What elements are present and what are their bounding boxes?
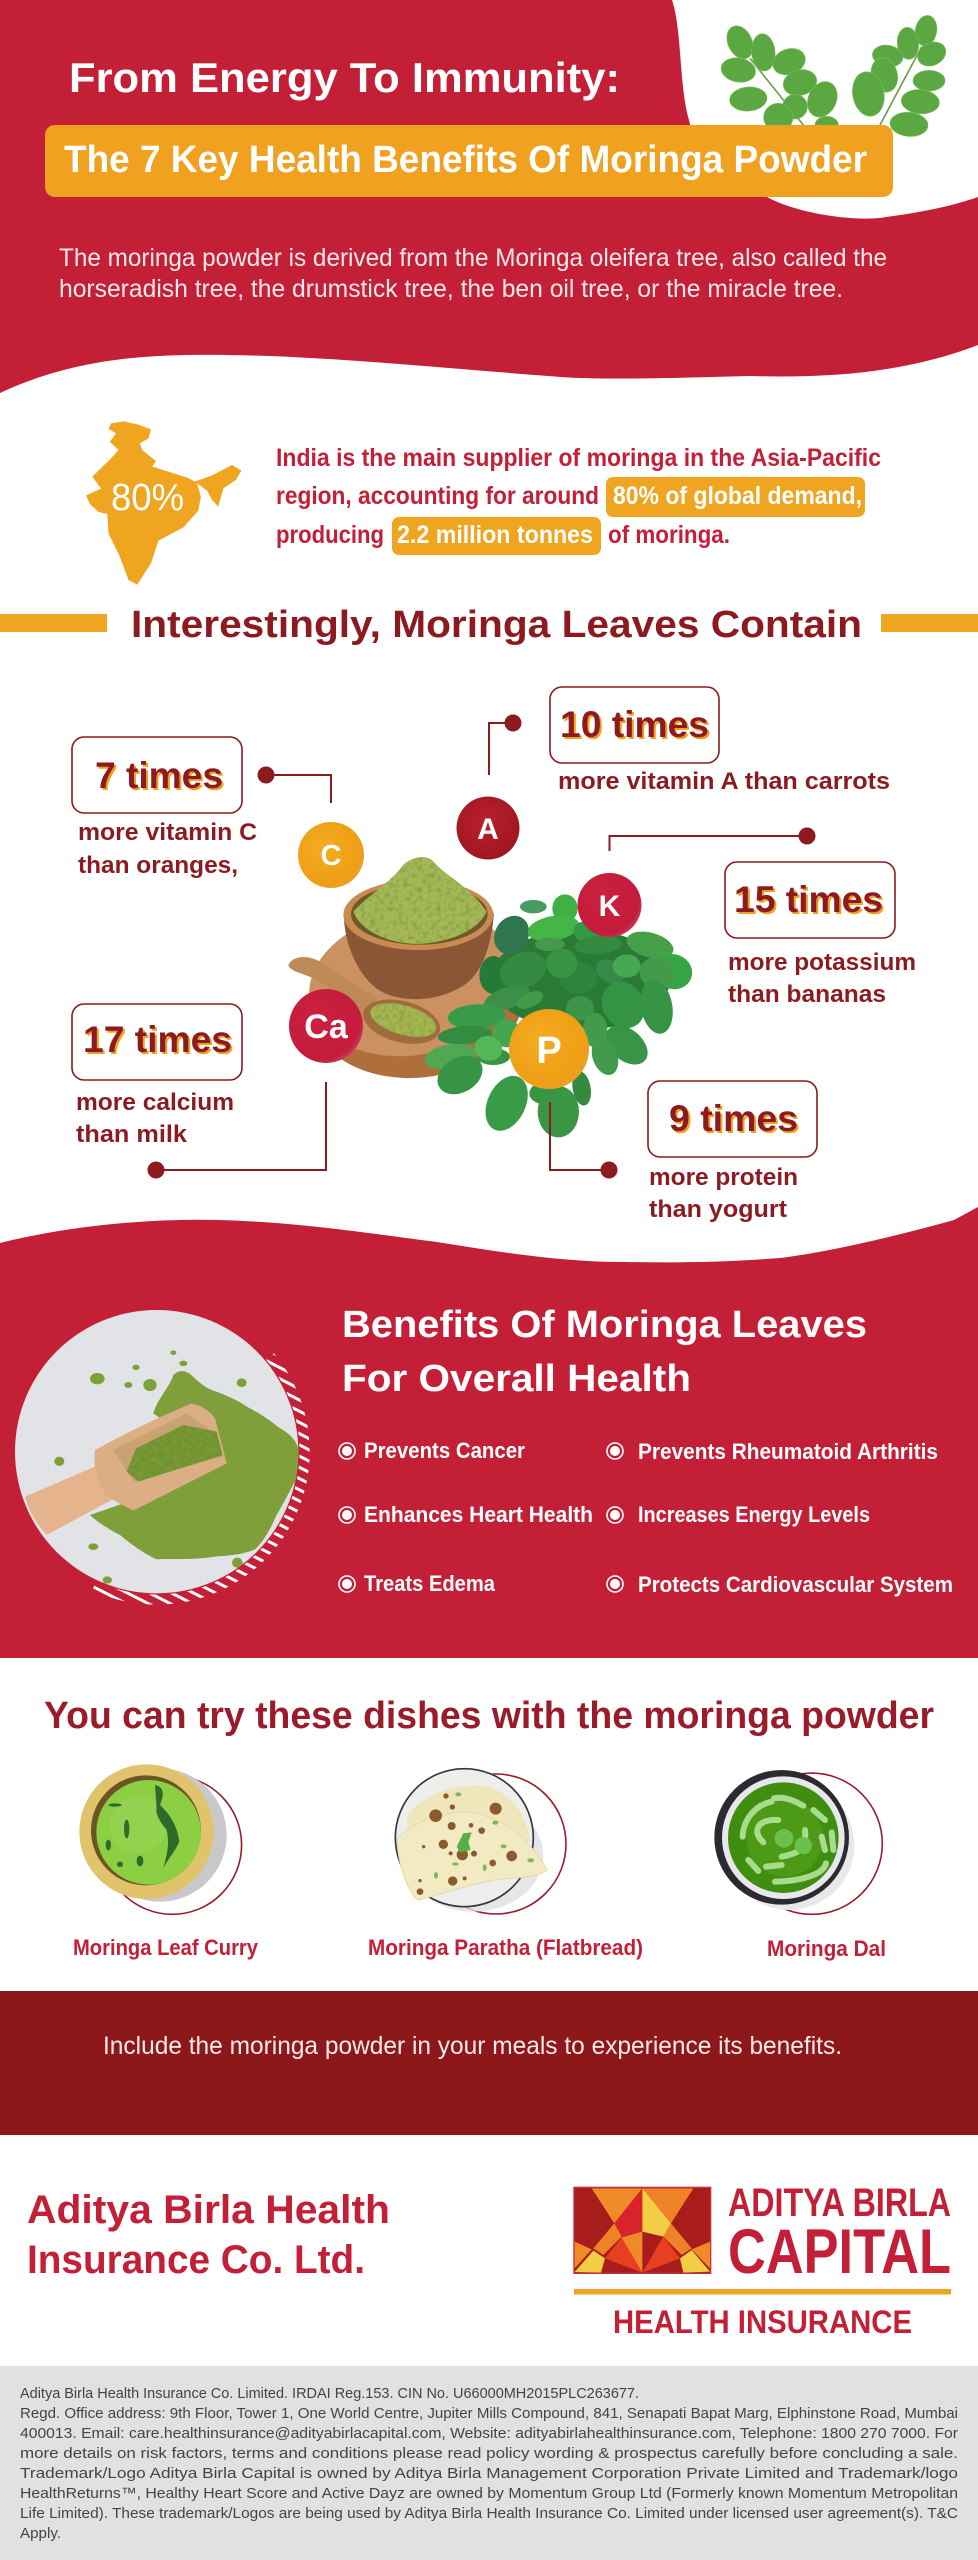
text block: supply facts: 80% of global demand, [613, 482, 862, 510]
stat: 15 times potassium: more potassium [728, 949, 916, 976]
logo: Aditya Birla Capital Health Insurance [574, 2181, 951, 2340]
stat: 17 times calcium: than milk [76, 1121, 188, 1148]
text block: supply facts: producing [276, 521, 384, 549]
stat: 9 times protein: 9 times [669, 1098, 798, 1139]
benefit list: Enhances Heart Health [364, 1502, 593, 1527]
stat: 7 times vitamin C: 7 times [95, 755, 223, 796]
panel: legal disclaimer [0, 2366, 978, 2560]
intro paragraph [59, 244, 887, 303]
stat: 17 times calcium: Ca [304, 1008, 349, 1046]
panel: benefits [0, 1207, 978, 1658]
company name: Insurance Co. Ltd. [27, 2238, 365, 2282]
dish: Moringa Leaf Curry [73, 1764, 259, 1960]
stat: 17 times calcium: more calcium [76, 1089, 234, 1116]
panel: legal disclaimer: Trademark/Logo Aditya Birla Capital is owned by Aditya Birla Management Corporation Private Limited and Trademark/logo [20, 2465, 958, 2482]
intro paragraph: The moringa powder is derived from the Moringa oleifera tree, also called the [59, 244, 887, 272]
panel: legal disclaimer: Apply. [20, 2525, 61, 2542]
title: From Energy To Immunity: [69, 54, 620, 101]
heading [342, 1304, 867, 1400]
red wave background [0, 1207, 978, 1658]
icon: India map with 80%: 80% [111, 477, 184, 519]
intro paragraph: horseradish tree, the drumstick tree, the ben oil tree, or the miracle tree. [59, 275, 843, 303]
stat: 9 times protein [509, 1009, 817, 1223]
illustration: bowl, spoon and moringa leaves [288, 857, 697, 1138]
stat: 9 times protein: P [536, 1030, 562, 1072]
panel: header [0, 0, 978, 393]
stat: 7 times vitamin C: more vitamin C [78, 819, 257, 846]
text block: supply facts: region, accounting for around [276, 482, 599, 510]
text block: supply facts [276, 444, 881, 555]
benefit list: Increases Energy Levels [638, 1502, 870, 1527]
stat: 7 times vitamin C: than oranges, [78, 852, 238, 879]
stat: 10 times vitamin A: A [477, 813, 499, 846]
heading: Interestingly, Moringa Leaves Contain: Interestingly, Moringa Leaves Contain [131, 604, 862, 646]
stat: 15 times potassium: than bananas [728, 981, 886, 1008]
stat: 15 times potassium: 15 times [734, 879, 883, 920]
panel: legal disclaimer: more details on risk factors, terms and conditions please read policy wording & prospectus carefully before concluding a sale. [20, 2445, 958, 2462]
benefit list: Prevents Rheumatoid Arthritis [638, 1439, 938, 1464]
plate [297, 895, 531, 1088]
stat: 9 times protein: than yogurt [649, 1196, 787, 1223]
panel: legal disclaimer: Life Limited). These trademark/Logos are being used by Aditya Birla Health Insurance Co. Limited under licensed user agreement(s). T&C [20, 2505, 958, 2522]
logo: Aditya Birla Capital Health Insurance: HEALTH INSURANCE [613, 2304, 912, 2340]
heading: For Overall Health [342, 1358, 691, 1400]
panel: legal disclaimer: 400013. Email: care.healthinsurance@adityabirlacapital.com, Website: adityabirlahealthinsurance.com, Telephone: 1800 270 7000. For [20, 2425, 958, 2442]
benefit list: Protects Cardiovascular System [638, 1572, 953, 1597]
stat: 10 times vitamin A: 10 times [560, 704, 709, 745]
text block: supply facts: 2.2 million tonnes [397, 521, 593, 549]
red header background with wavy edge [0, 0, 978, 393]
white corner blob [672, 0, 978, 219]
stat: 17 times calcium [72, 989, 363, 1178]
stat: 10 times vitamin A: more vitamin A than carrots [558, 768, 890, 795]
stat: 7 times vitamin C [72, 737, 364, 888]
stat: 9 times protein: more protein [649, 1164, 798, 1191]
benefit list: Prevents Cancer [364, 1438, 525, 1463]
stat: 17 times calcium: 17 times [83, 1019, 232, 1060]
dish: Moringa Dal [714, 1770, 886, 1961]
dish: Moringa Paratha: Moringa Paratha (Flatbread) [368, 1935, 643, 1960]
panel: legal disclaimer: Regd. Office address: 9th Floor, Tower 1, One World Centre, Jupiter Mills Compound, 841, Senapati Bapat Marg, Elphinstone Road, Mumbai [20, 2405, 958, 2422]
panel: legal disclaimer: HealthReturns™, Healthy Heart Score and Active Dayz are owned by Momentum Group Ltd (Formerly known Momentum Metropolitan [20, 2485, 958, 2502]
logo mark [574, 2187, 711, 2273]
leaf cluster [423, 894, 697, 1138]
bowl with powder [343, 857, 494, 999]
dish: Moringa Leaf Curry: Moringa Leaf Curry [73, 1935, 259, 1960]
panel: closing message [0, 1991, 978, 2135]
benefit list: Treats Edema [364, 1571, 496, 1596]
photo: moringa powder with scoop [15, 1310, 298, 1594]
panel: legal disclaimer: Aditya Birla Health Insurance Co. Limited. IRDAI Reg.153. CIN No. U66000MH2015PLC263677. [20, 2385, 639, 2402]
subtitle bar [45, 125, 893, 197]
panel: closing message: Include the moringa powder in your meals to experience its benefits. [103, 2032, 842, 2060]
heading: Benefits Of Moringa Leaves [342, 1304, 867, 1346]
stat: 10 times vitamin A [456, 687, 890, 860]
company name [27, 2188, 390, 2282]
benefit list [339, 1438, 953, 1597]
icon: moringa sprigs [719, 14, 950, 138]
stat: 15 times potassium: K [599, 890, 621, 923]
dish: Moringa Paratha [368, 1769, 643, 1960]
dish: Moringa Dal: Moringa Dal [767, 1936, 886, 1961]
company name: Aditya Birla Health [27, 2188, 390, 2232]
heading: Interestingly, Moringa Leaves Contain [0, 604, 978, 646]
icon: India map with 80% [86, 421, 241, 585]
text block: supply facts: of moringa. [608, 521, 730, 549]
wooden spoon [288, 957, 445, 1051]
stat: 15 times potassium [578, 828, 916, 1008]
stat: 7 times vitamin C: C [321, 840, 342, 872]
panel: India supply [86, 421, 881, 585]
subtitle bar: The 7 Key Health Benefits Of Moringa Powder [64, 139, 867, 181]
striped ring [94, 1357, 305, 1600]
text block: supply facts: India is the main supplier of moringa in the Asia-Pacific [276, 444, 881, 472]
heading: dishes: You can try these dishes with the moringa powder [44, 1695, 934, 1737]
